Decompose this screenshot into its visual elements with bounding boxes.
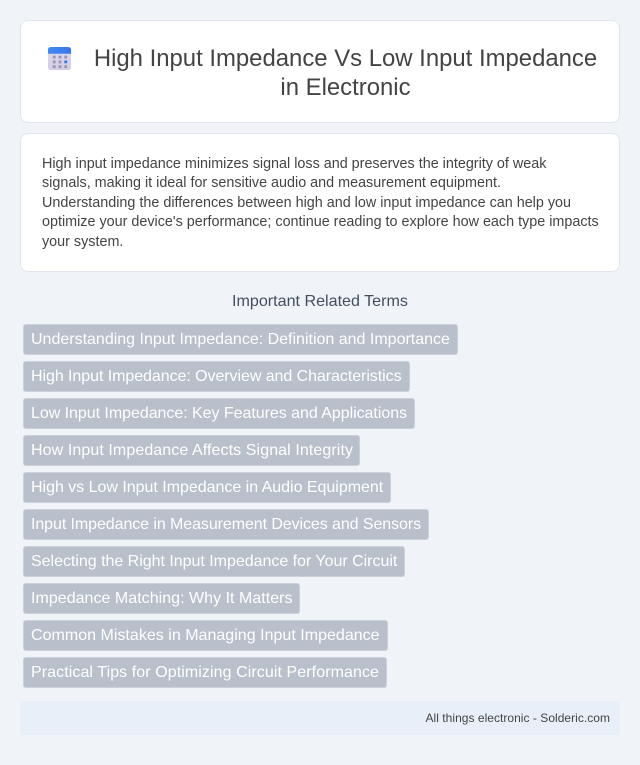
tag 8: Impedance Matching: Why It Matters	[31, 590, 293, 607]
heading: important related terms: Important Related Terms	[232, 292, 408, 310]
tag 5: High vs Low Input Impedance in Audio Equipment	[31, 479, 383, 496]
intro paragraph	[42, 156, 599, 250]
tag 4: How Input Impedance Affects Signal Integrity	[31, 442, 353, 459]
tag 10	[23, 657, 387, 688]
title text: High Input Impedance Vs Low Input Impedance	[94, 45, 597, 72]
panel: introduction	[20, 133, 620, 272]
intro paragraph: your system.	[42, 234, 123, 250]
tag 7	[23, 546, 405, 577]
tag 3: Low Input Impedance: Key Features and Applications	[31, 405, 407, 422]
footer credit: All things electronic - Solderic.com	[426, 711, 610, 725]
tag 3	[23, 398, 415, 429]
tag 5	[23, 472, 391, 503]
tag 6	[23, 509, 429, 540]
tag 4	[23, 435, 360, 466]
title text: in Electronic	[280, 74, 411, 101]
intro paragraph: High input impedance minimizes signal loss and preserves the integrity of weak	[42, 156, 546, 172]
tag 1	[23, 324, 458, 355]
panel: title card	[20, 20, 620, 123]
list: related terms	[23, 324, 458, 688]
tag 9: Common Mistakes in Managing Input Impedance	[31, 627, 380, 644]
title text	[94, 45, 597, 101]
footer	[20, 701, 620, 735]
intro paragraph: signals, making it ideal for sensitive audio and measurement equipment.	[42, 175, 501, 191]
tag 2: High Input Impedance: Overview and Characteristics	[31, 368, 402, 385]
tag 7: Selecting the Right Input Impedance for Your Circuit	[31, 553, 397, 570]
intro paragraph: optimize your device's performance; continue reading to explore how each type impacts	[42, 214, 599, 230]
tag 2	[23, 361, 410, 392]
tag 8	[23, 583, 300, 614]
icon: calendar	[48, 47, 72, 70]
tag 1: Understanding Input Impedance: Definition and Importance	[31, 331, 450, 348]
tag 10: Practical Tips for Optimizing Circuit Performance	[31, 664, 379, 681]
tag 6: Input Impedance in Measurement Devices and Sensors	[31, 516, 421, 533]
tag 9	[23, 620, 388, 651]
intro paragraph: Understanding the differences between high and low input impedance can help you	[42, 195, 571, 211]
